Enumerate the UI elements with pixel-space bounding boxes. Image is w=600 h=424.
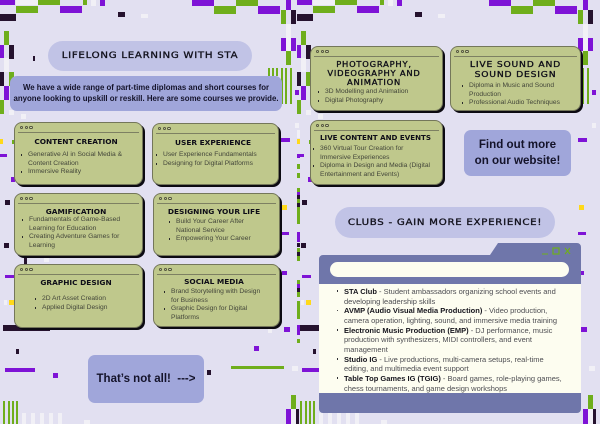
card: user experience: Designing for Digital Platforms (163, 160, 253, 167)
card: photography, videography and animation: Digital Photography (325, 97, 383, 104)
card: photography, videography and animation (310, 46, 443, 111)
club descriptions: camera operation, lighting, sound, and immersive media training (344, 316, 557, 325)
card: photography, videography and animation: VIDEOGRAPHY AND (327, 69, 421, 78)
card: gamification: Learning for Education (29, 225, 96, 232)
card: live content and events: Entertainment and Events) (320, 171, 399, 178)
card: content creation (14, 122, 143, 185)
card: social media: Platforms (171, 314, 199, 321)
callout: find out more: Find out more (479, 138, 556, 151)
window panel: clubs list (319, 243, 581, 413)
card: gamification: Fundamentals of Game-Based (29, 216, 120, 223)
card: designing your life (153, 193, 280, 256)
card: social media: Brand Storytelling with Design (171, 288, 260, 295)
card: graphic design: Applied Digital Design (42, 304, 107, 311)
card: user experience: USER EXPERIENCE (175, 138, 251, 147)
callout: find out more: on our website! (475, 154, 560, 166)
callout: that's not all: That’s not all! ---> (97, 373, 195, 385)
club descriptions: Table Top Games IG (TGIG) - Board games, role-playing games, (344, 374, 562, 383)
club descriptions: Studio IG - Live productions, multi-camera setups, real-time (344, 355, 544, 364)
club descriptions: chess tournaments, and game design workshops (344, 384, 507, 393)
card: user experience (152, 123, 279, 185)
club descriptions: production with synthesizers, MIDI controllers, and event (344, 335, 532, 344)
card: live content and events: Diploma in Design and Media (Digital (320, 162, 430, 169)
heading pill: lifelong learning (48, 41, 252, 71)
card: photography, videography and animation: PHOTOGRAPHY, (336, 60, 412, 69)
card: graphic design: GRAPHIC DESIGN (40, 278, 112, 287)
card: content creation: Immersive Reality (28, 168, 81, 175)
club descriptions: editing, and multimedia event support (344, 364, 469, 373)
club descriptions: STA Club - Student ambassadors organizing school events and (344, 287, 556, 296)
callout: that's not all (88, 355, 204, 403)
card: live sound and sound design: Production (469, 91, 501, 98)
card: gamification: GAMIFICATION (46, 207, 106, 216)
card: live sound and sound design: LIVE SOUND AND (470, 60, 561, 69)
card: user experience: User Experience Fundamentals (163, 151, 257, 158)
card: designing your life: DESIGNING YOUR LIFE (168, 207, 260, 216)
card: social media: for Business (171, 297, 208, 304)
callout: find out more (464, 130, 571, 176)
card: graphic design (14, 264, 143, 328)
card: designing your life: Empowering Your Career (176, 235, 251, 242)
club descriptions: developing leadership skills (344, 297, 435, 306)
card: content creation: CONTENT CREATION (34, 137, 118, 146)
card: content creation: Content Creation (28, 160, 79, 167)
club descriptions: Electronic Music Production (EMP) - DJ performance, music (344, 326, 552, 335)
intro text box: We have a wide range of part-time diplomas and short courses for (23, 83, 269, 92)
card: social media (153, 264, 280, 327)
club descriptions: AVMP (Audio Visual Media Production) - Video production, (344, 306, 547, 315)
intro text box: anyone looking to upskill or reskill. Here are some courses we provide. (13, 94, 279, 103)
card: live sound and sound design: SOUND DESIGN (475, 70, 556, 79)
card: live sound and sound design (450, 46, 581, 111)
card: designing your life: Build Your Career After (176, 218, 244, 225)
heading pill: clubs (335, 207, 555, 238)
card: social media: SOCIAL MEDIA (184, 277, 244, 286)
card: live content and events: Immersive Experiences (320, 154, 390, 161)
card: designing your life: National Service (176, 227, 225, 234)
club descriptions: management (344, 345, 388, 354)
card: live content and events: 360 Virtual Tour Creation for (320, 145, 403, 152)
card: graphic design: 2D Art Asset Creation (42, 295, 106, 302)
heading pill: lifelong learning: LIFELONG LEARNING WITH STA (62, 51, 238, 61)
card: gamification (14, 193, 143, 256)
club descriptions (337, 287, 562, 393)
card: live sound and sound design: Professional Audio Techniques (469, 99, 560, 106)
card: gamification: Creating Adventure Games for (29, 233, 119, 240)
window frame (319, 243, 581, 413)
card: live content and events (310, 120, 443, 185)
card: live content and events: LIVE CONTENT AND EVENTS (320, 133, 431, 142)
card: live sound and sound design: Diploma in Music and Sound (469, 82, 554, 89)
card: photography, videography and animation: 3D Modelling and Animation (325, 88, 408, 95)
heading pill: clubs: CLUBS - GAIN MORE EXPERIENCE! (348, 218, 542, 228)
intro text box (10, 76, 282, 111)
card: content creation: Generative AI in Social Media & (28, 151, 122, 158)
card: social media: Graphic Design for Digital (171, 305, 247, 312)
card: gamification: Learning (29, 242, 55, 249)
card: photography, videography and animation: ANIMATION (347, 78, 401, 87)
